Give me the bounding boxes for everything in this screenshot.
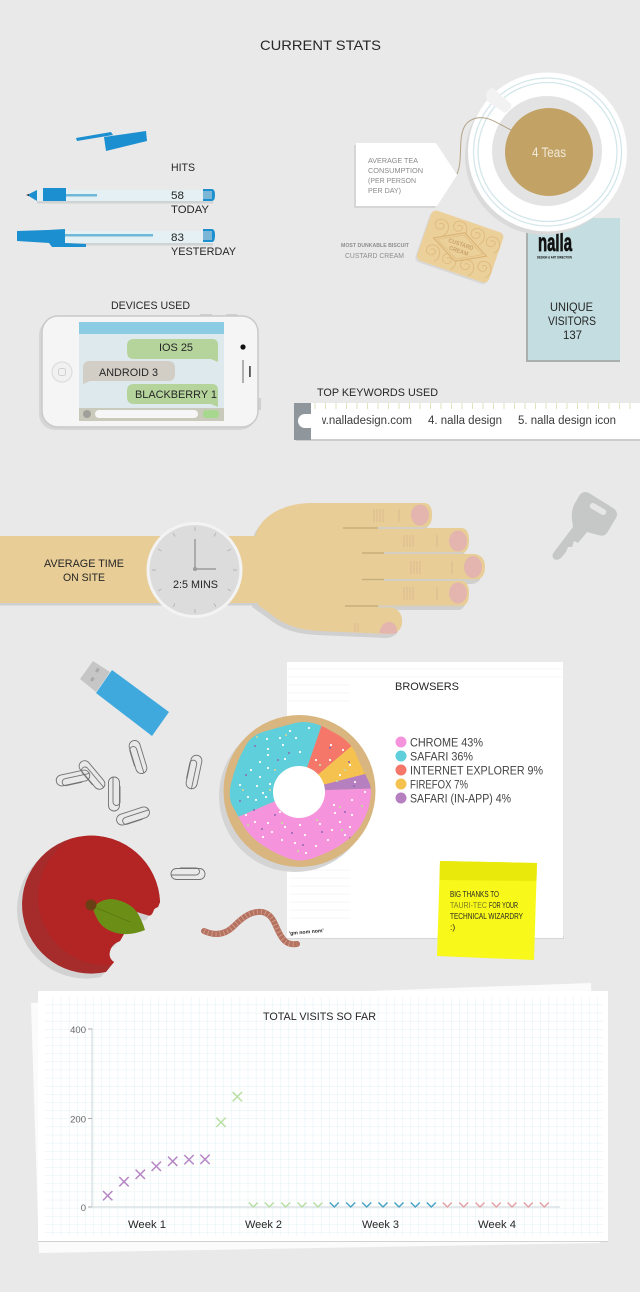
message: iOS <box>127 339 218 362</box>
panel: total visits chart <box>31 983 608 1253</box>
icon: phone <box>39 314 261 430</box>
panel: hits <box>17 131 237 258</box>
message: Android <box>83 361 175 384</box>
panel: average time on site <box>0 503 485 638</box>
icon: watch <box>146 522 242 618</box>
browsers heading: BROWSERS <box>395 681 459 693</box>
panel: browsers paper <box>199 662 564 939</box>
chart legend: FIREFOX 7% <box>410 780 468 792</box>
week 4 points <box>443 1202 549 1207</box>
icon: worm <box>204 912 297 944</box>
icon: key <box>552 492 617 560</box>
week 1 points <box>103 1155 210 1200</box>
week labels: Week 4 <box>478 1219 516 1231</box>
unique visitors value: 137 <box>563 330 582 342</box>
nalla logo <box>537 229 573 260</box>
week labels <box>128 1219 516 1231</box>
chart axes: 0 <box>81 1203 86 1214</box>
keyword list: 5. nalla design icon <box>518 415 616 427</box>
chart axes: 400 <box>70 1025 86 1036</box>
sticky note: TECHNICAL WIZARDRY <box>450 911 523 921</box>
sticky note: FOR YOUR <box>489 900 518 910</box>
front sheet with grid <box>38 991 608 1242</box>
chart axes: 200 <box>70 1114 86 1126</box>
sticky note: BIG THANKS TO <box>450 889 499 899</box>
week 2 points <box>216 1092 322 1207</box>
nalla logo: DESIGN & ART DIRECTION <box>537 256 572 260</box>
icon: pen with hits today <box>26 188 215 204</box>
panel: top keywords <box>294 387 640 441</box>
keyword list <box>322 415 616 426</box>
chart legend: SAFARI (IN-APP) 4% <box>410 794 511 806</box>
sticky note: :) <box>450 922 455 932</box>
biscuit label: MOST DUNKABLE BISCUIT <box>341 243 410 249</box>
icon: ruler <box>294 403 640 441</box>
time label <box>44 558 124 584</box>
sticky note: TAURI-TEC <box>450 900 487 910</box>
biscuit label <box>341 243 410 260</box>
panel: unique visitors card <box>526 218 620 362</box>
icon: watch: 2:5 MINS <box>173 579 218 591</box>
tea tag: CONSUMPTION <box>368 166 423 175</box>
biscuit label: CUSTARD CREAM <box>345 251 404 260</box>
keyword list: 4. nalla design <box>428 415 502 427</box>
icon: custard cream biscuit: CUSTARD <box>447 238 474 252</box>
chart legend <box>396 736 543 806</box>
chart legend: SAFARI 36% <box>410 752 473 764</box>
title: CURRENT STATS <box>260 37 381 53</box>
message: iOS: IOS 25 <box>159 342 193 354</box>
week 3 points <box>330 1202 436 1207</box>
week labels: Week 2 <box>245 1219 282 1231</box>
message: BlackBerry: BLACKBERRY 1 <box>135 389 217 401</box>
today's hits: TODAY <box>171 204 210 216</box>
chart heading: TOTAL VISITS SO FAR <box>263 1011 376 1023</box>
today's hits <box>171 190 210 216</box>
icon: pen cap <box>76 131 147 151</box>
nalla logo: nalla <box>538 229 573 257</box>
icon: capped pen with hits yesterday <box>17 229 215 247</box>
yesterday's hits: 83 <box>171 232 184 244</box>
yesterday's hits: YESTERDAY <box>171 246 237 258</box>
chart legend: INTERNET EXPLORER 9% <box>410 766 543 778</box>
yesterday's hits <box>171 232 237 258</box>
icon: custard cream biscuit <box>414 209 505 286</box>
chart axes <box>70 1025 560 1214</box>
week labels: Week 3 <box>362 1219 399 1231</box>
icon: bitten apple <box>17 836 160 978</box>
unique visitors value: VISITORS <box>548 316 596 328</box>
week labels: Week 1 <box>128 1219 166 1231</box>
tea tag: PER DAY) <box>368 186 401 195</box>
caption: nom nom nom: 'gm nom nom' <box>289 928 324 937</box>
icon: usb stick <box>80 661 169 736</box>
devices heading: DEVICES USED <box>111 300 190 312</box>
message: BlackBerry <box>127 384 218 407</box>
time label: ON SITE <box>63 572 105 584</box>
icon: custard cream biscuit: CREAM <box>448 246 469 258</box>
tea tag: (PER PERSON <box>368 176 416 185</box>
tea tag: AVERAGE TEA <box>368 156 418 165</box>
panel: devices used <box>39 300 261 430</box>
keywords heading: TOP KEYWORDS USED <box>317 387 438 399</box>
icon: paperclips <box>55 739 205 880</box>
icon: hand <box>252 503 485 638</box>
back sheet of paper <box>31 983 600 1253</box>
tea count: 4 Teas <box>532 145 566 160</box>
today's hits: 58 <box>171 190 184 202</box>
keyword list: www.nalladesign.com <box>300 415 412 427</box>
hits heading: HITS <box>171 162 195 174</box>
unique visitors value: UNIQUE <box>550 302 593 314</box>
chart: donut of browser share <box>219 715 376 872</box>
unique visitors value <box>548 302 596 342</box>
message: Android: ANDROID 3 <box>99 367 158 379</box>
tea tag <box>354 143 457 208</box>
icon: arm <box>0 536 262 606</box>
sticky note <box>437 861 537 960</box>
icon: cup and saucer <box>457 72 627 235</box>
chart legend: CHROME 43% <box>410 738 483 750</box>
panel: tea consumption <box>341 72 627 286</box>
time label: AVERAGE TIME <box>44 558 124 570</box>
